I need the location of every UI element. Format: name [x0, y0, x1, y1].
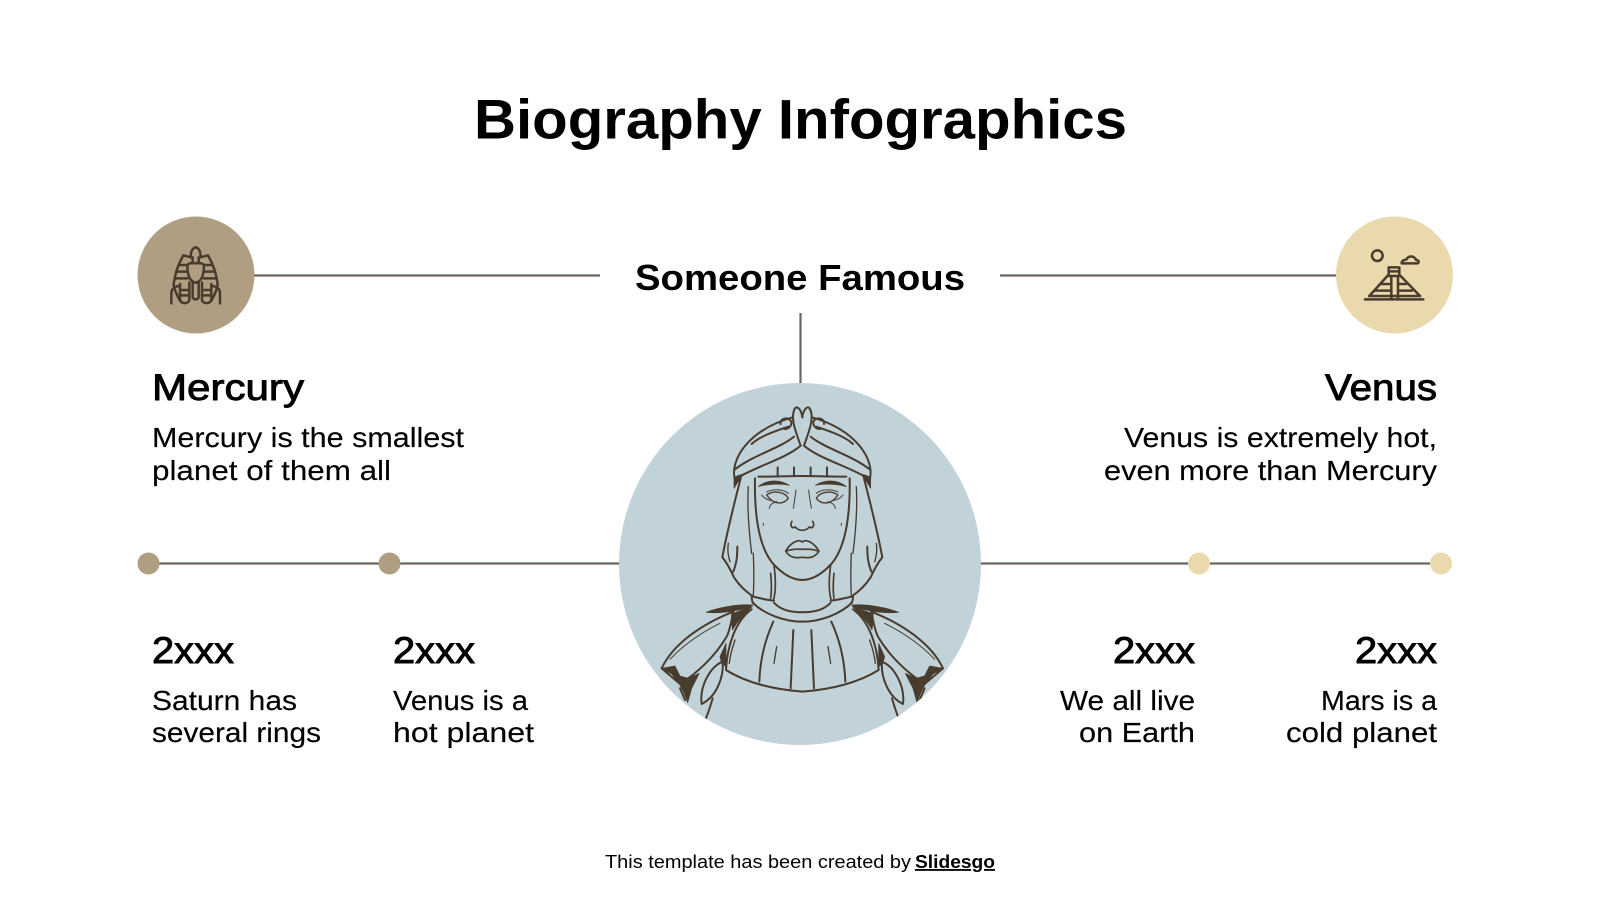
connector lines from heading [254, 276, 1336, 383]
milestone 1: several rings [152, 717, 321, 748]
footer credit: This template has been created by [605, 851, 912, 872]
text block: Mercury [152, 367, 464, 486]
milestone 4: 2xxx [1355, 630, 1438, 671]
text block: Mercury: Mercury [152, 367, 305, 408]
text block: Venus: Venus [1325, 367, 1437, 408]
milestone 4: cold planet [1286, 717, 1437, 748]
milestone 4: Mars is a [1321, 685, 1437, 716]
text block: Venus: even more than Mercury [1104, 455, 1437, 486]
timeline lines [148, 562, 1441, 565]
milestone 2: Venus is a [393, 685, 528, 716]
milestone 3: on Earth [1079, 717, 1195, 748]
milestone 1: Saturn has [152, 685, 297, 716]
milestone 2: hot planet [393, 717, 534, 748]
timeline dots [138, 552, 1452, 574]
icon: pharaoh mask [138, 216, 254, 334]
footer credit: Slidesgo [915, 851, 995, 872]
central heading: Someone Famous: Someone Famous [635, 257, 965, 298]
milestone 1: 2xxx [152, 630, 235, 671]
milestone 3: 2xxx [1113, 630, 1196, 671]
text block: Venus [1104, 367, 1437, 486]
icon: pyramid [1336, 216, 1453, 334]
text block: Mercury: planet of them all [152, 455, 391, 486]
title: Biography Infographics [474, 88, 1127, 150]
milestone 2: 2xxx [393, 630, 476, 671]
milestone 1 [152, 630, 321, 748]
milestone 2 [393, 630, 534, 748]
milestone 3 [1060, 630, 1196, 748]
milestone 4 [1286, 630, 1438, 748]
milestone 3: We all live [1060, 685, 1195, 716]
portrait illustration [619, 383, 981, 745]
text block: Venus: Venus is extremely hot, [1124, 422, 1437, 453]
text block: Mercury: Mercury is the smallest [152, 422, 464, 453]
